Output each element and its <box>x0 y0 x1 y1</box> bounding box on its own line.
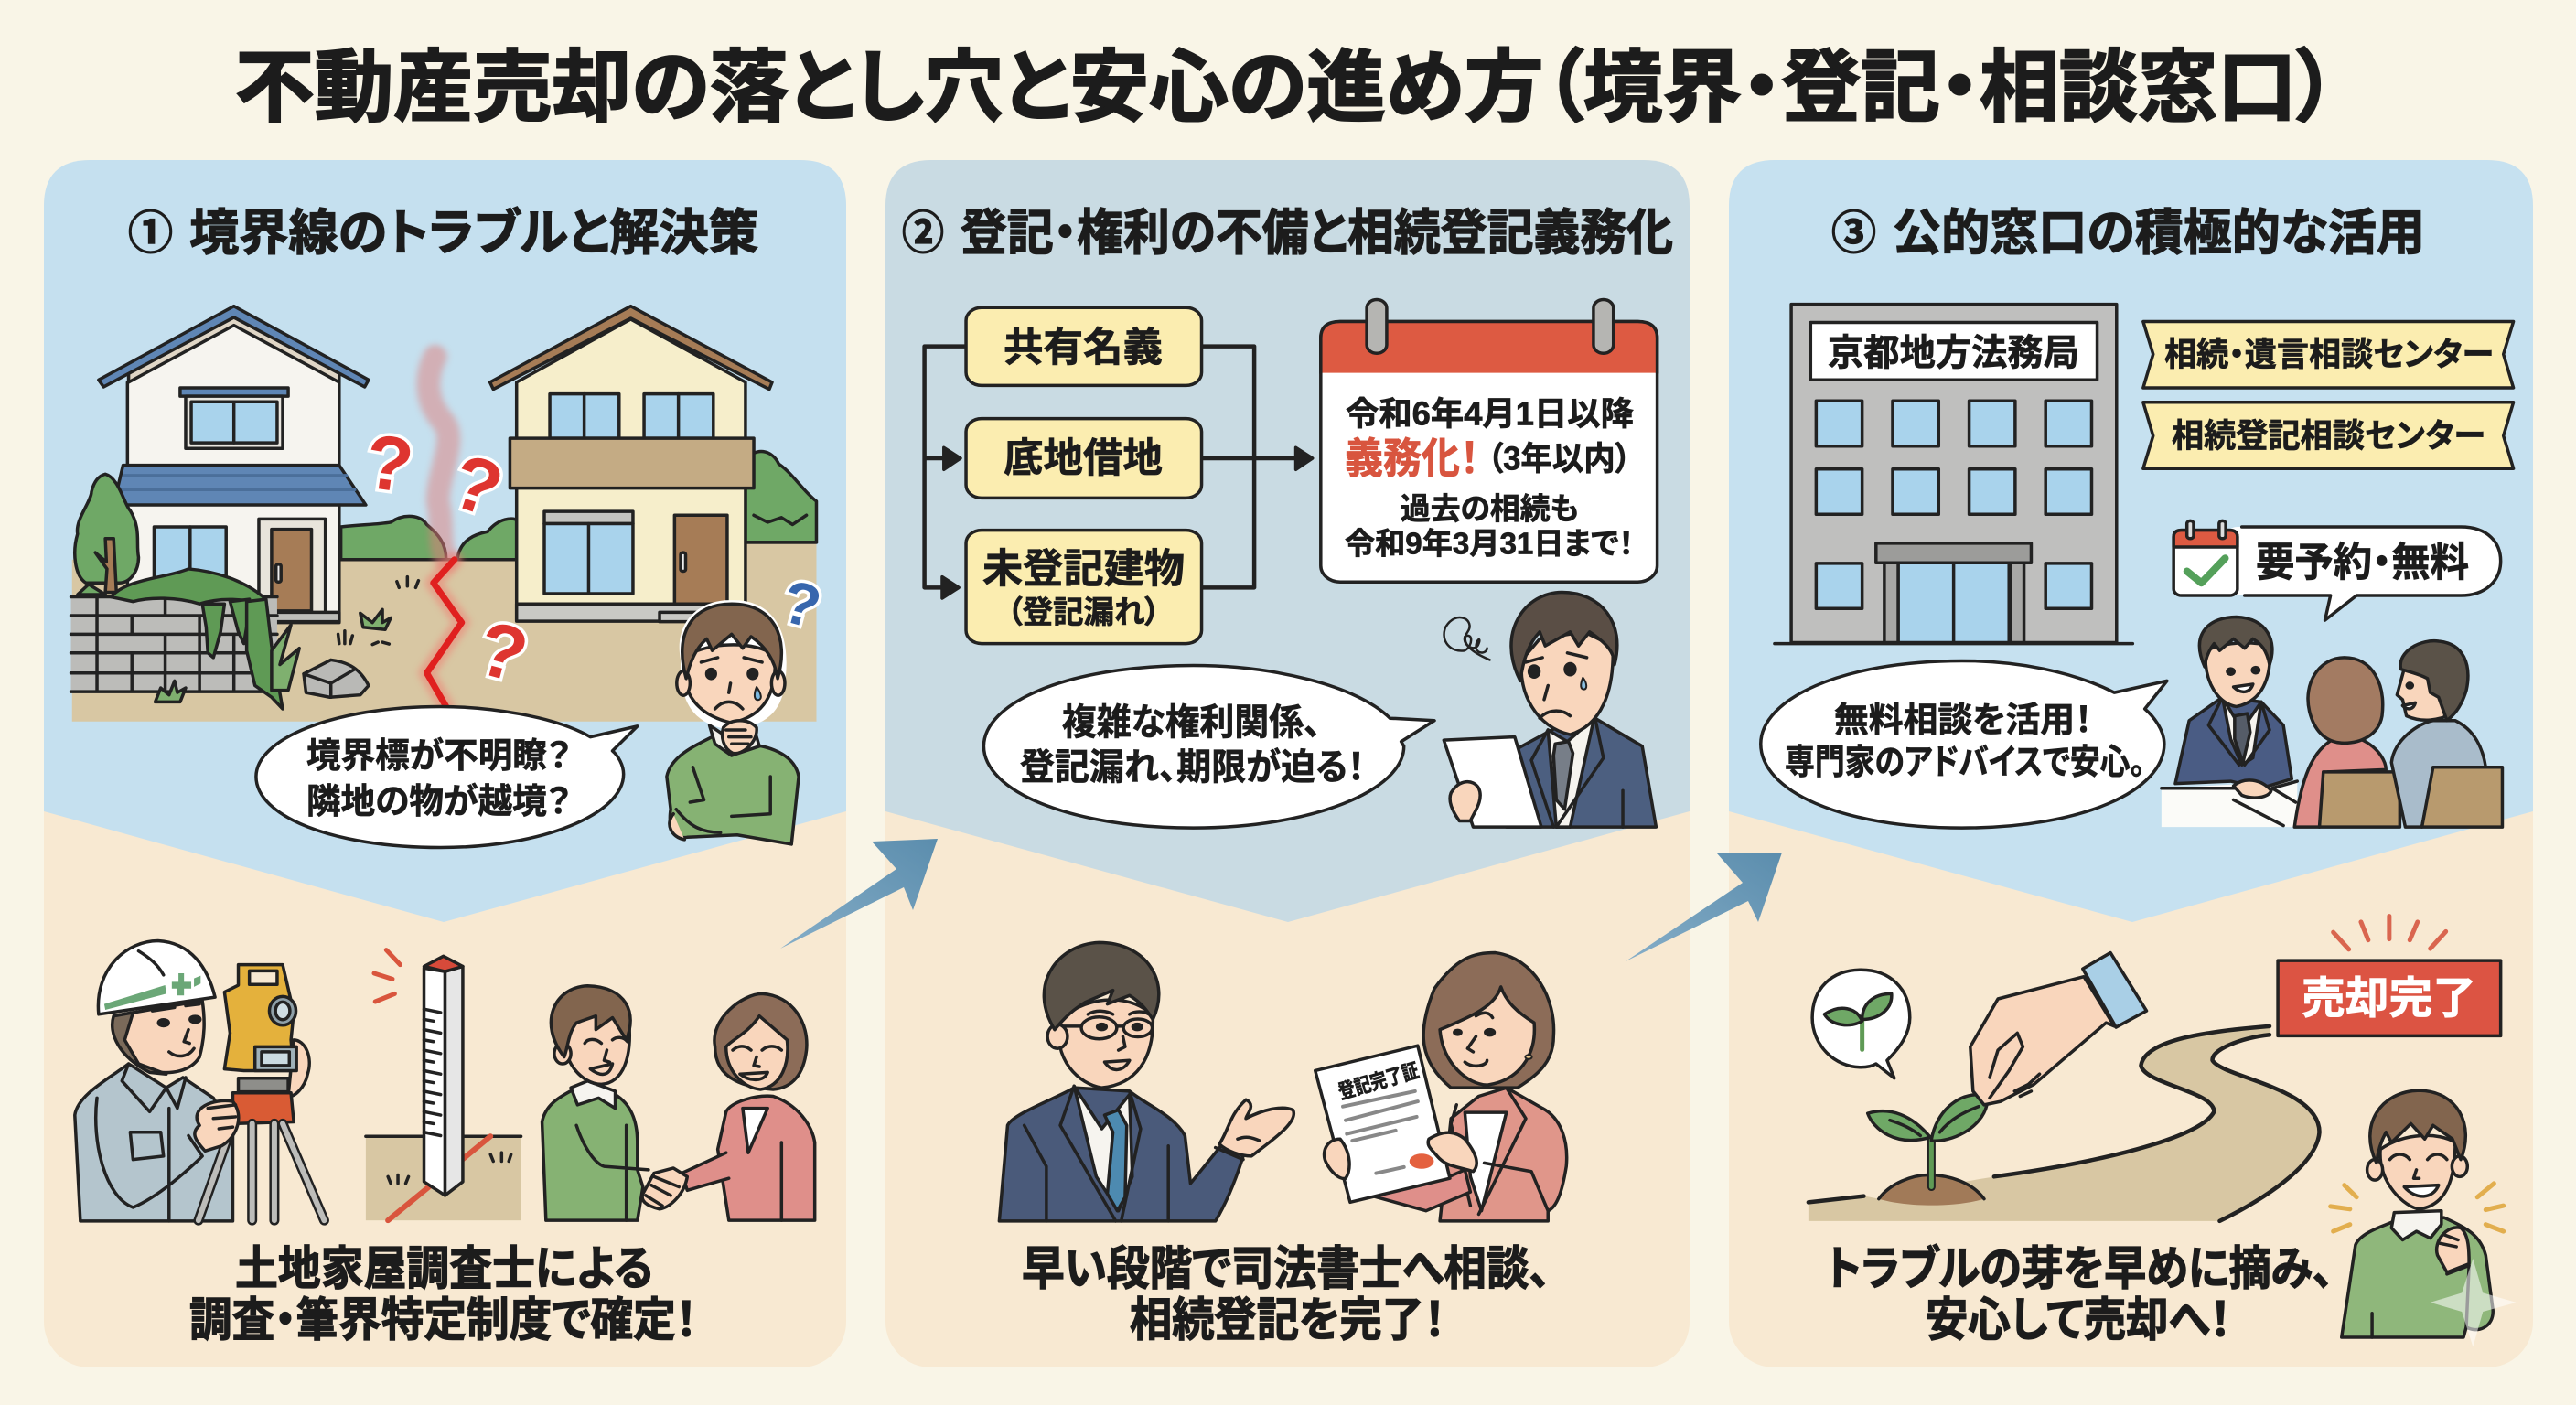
illustration: two houses with boundary crack <box>71 306 816 722</box>
speech bubble: free consultation <box>1761 660 2167 828</box>
illustration: hand picking sprout <box>1868 953 2146 1206</box>
worried man in suit reading notice <box>1444 592 1656 827</box>
speech bubble: complexity <box>983 666 1434 828</box>
calendar: deadline: 過去の相続も <box>1401 492 1579 525</box>
boundary haze and crack <box>428 357 448 560</box>
panel heading: 登記・権利の不備と相続登記義務化 <box>961 206 1673 261</box>
illustration: client with registration certificate <box>1315 953 1567 1221</box>
illustration: legal affairs bureau building: 京都地方法務局 <box>1828 333 2079 373</box>
banners: consultation centres: 相続登記相談センター <box>2172 417 2485 454</box>
icon: question marks: ? <box>442 437 512 533</box>
caption: consult early: 早い段階で司法書士へ相談、 <box>1022 1242 1551 1295</box>
caption: survey result: 土地家屋調査士による <box>235 1242 653 1295</box>
caption: nip trouble early: トラブルの芽を早めに摘み、 <box>1826 1242 2334 1295</box>
speech bubble: boundary questions: 境界標が不明瞭？ <box>306 737 571 776</box>
house left <box>127 324 339 623</box>
flow diagram: right issues: 共有名義 <box>1004 326 1163 370</box>
certificate label: 登記完了証 <box>1336 1059 1422 1103</box>
rock <box>304 660 369 697</box>
title: 不動産売却の落とし穴と安心の進め方（境界・登記・相談窓口） <box>235 44 2336 132</box>
speech bubble: boundary questions: 隣地の物が越境？ <box>306 783 571 821</box>
speech bubble: complexity: 登記漏れ、期限が迫る！ <box>1020 747 1365 788</box>
panel heading: ① <box>128 208 173 259</box>
calendar: deadline: 令和9年3月31日まで！ <box>1345 527 1634 560</box>
ivy <box>111 569 266 604</box>
panel heading: ③ <box>1831 208 1876 259</box>
speech bubble: free consultation: 無料相談を活用！ <box>1834 702 2092 740</box>
icon: question marks: ? <box>775 566 828 641</box>
panel: public counters <box>1729 160 2533 1367</box>
caption: consult early <box>1022 1242 1551 1346</box>
panel background <box>44 160 846 1367</box>
panel heading: ② <box>902 208 944 259</box>
panel heading: 境界線のトラブルと解決策 <box>189 206 758 261</box>
flow diagram: right issues: （登記漏れ） <box>1007 595 1160 630</box>
illustration: happy seller <box>2331 1090 2517 1346</box>
caption: nip trouble early <box>1826 1242 2334 1346</box>
panel background <box>886 160 1690 1367</box>
calendar: deadline: 令和6年4月1日以降 <box>1346 395 1634 432</box>
flow diagram: right issues: 未登記建物 <box>982 547 1185 591</box>
panel heading: 公的窓口の積極的な活用 <box>1893 206 2425 261</box>
illustration: land surveyor <box>75 940 324 1221</box>
flow diagram: right issues <box>925 307 1313 644</box>
icon: question marks: ? <box>469 604 537 699</box>
banners: consultation centres <box>2143 322 2514 468</box>
panel background <box>1729 160 2533 1367</box>
sign: sale complete: 売却完了 <box>2302 975 2476 1023</box>
illustration: free consultation meeting <box>2162 617 2502 827</box>
illustration: boundary stake <box>366 950 521 1220</box>
arrow: panel 1 to panel 2 <box>780 839 938 949</box>
illustration: owner and neighbour shaking hands <box>542 986 815 1220</box>
panel: boundary trouble <box>44 160 846 1367</box>
panel: registration rights <box>886 160 1690 1367</box>
sign: sale complete <box>2278 917 2501 1035</box>
speech bubble: free consultation: 専門家のアドバイスで安心。 <box>1785 744 2145 782</box>
icon: question marks: ? <box>360 418 419 509</box>
banners: consultation centres: 相続・遺言相談センター <box>2164 335 2494 373</box>
calendar: deadline: 義務化！ <box>1345 434 1479 482</box>
calendar: deadline <box>1321 300 1658 582</box>
caption: survey result <box>189 1242 697 1346</box>
caption: survey result: 調査・筆界特定制度で確定！ <box>189 1293 697 1346</box>
tree <box>75 474 138 583</box>
caption: nip trouble early: 安心して売却へ！ <box>1926 1293 2231 1346</box>
house right <box>517 319 746 620</box>
callout: reservation required, free <box>2174 520 2501 620</box>
caption: consult early: 相続登記を完了！ <box>1130 1293 1445 1346</box>
worried man in green sweater <box>667 600 799 844</box>
stone wall <box>71 597 277 692</box>
speech bubble: complexity: 複雑な権利関係、 <box>1062 702 1321 743</box>
icon: question marks <box>360 418 828 699</box>
illustration: winding road to sale <box>1809 1026 2320 1221</box>
arrow: panel 2 to panel 3 <box>1626 853 1782 961</box>
calendar: deadline: （3年以内） <box>1487 439 1631 477</box>
icon: sprout thought bubble <box>1812 970 1910 1078</box>
illustration: legal affairs bureau building <box>1775 305 2132 644</box>
speech bubble: boundary questions <box>256 706 638 848</box>
illustration: judicial scrivener <box>999 942 1293 1221</box>
flow diagram: right issues: 底地借地 <box>1004 435 1163 481</box>
callout: reservation required, free: 要予約・無料 <box>2256 540 2469 585</box>
